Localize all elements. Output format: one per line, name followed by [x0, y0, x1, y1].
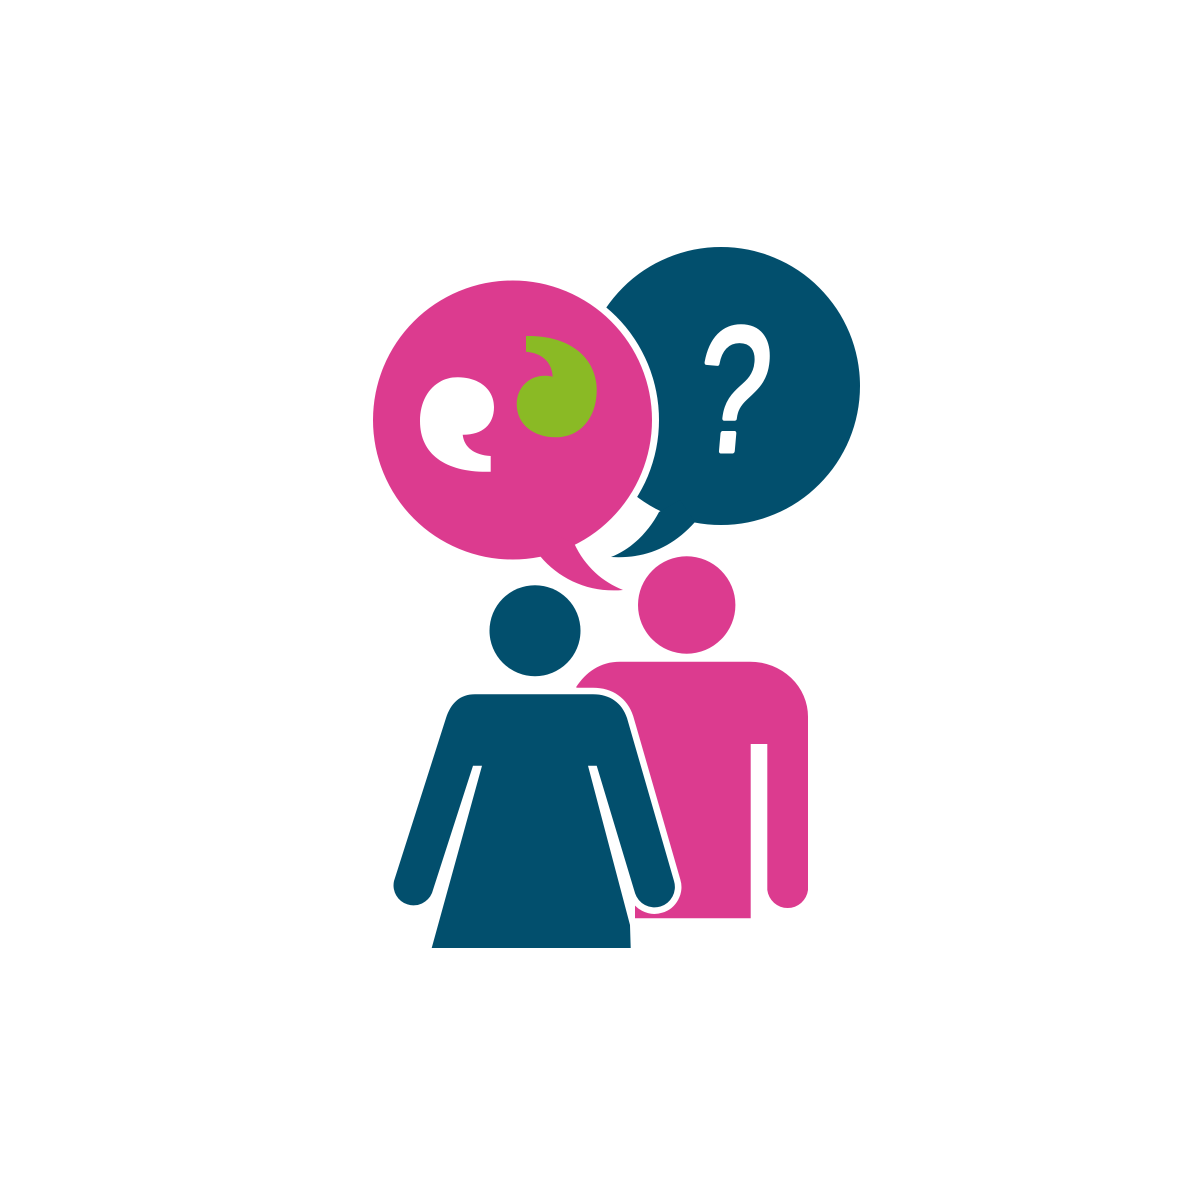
quote mark: white [420, 377, 494, 472]
woman body [394, 694, 675, 948]
speech bubble: pink quotes [366, 274, 659, 590]
speech bubble: navy question [582, 247, 860, 557]
man body [576, 662, 808, 918]
person: man [576, 556, 808, 918]
person: woman [394, 585, 675, 948]
man head [638, 556, 735, 654]
question mark: ? [690, 290, 779, 489]
woman head [490, 585, 580, 676]
quote mark: green [517, 336, 597, 437]
